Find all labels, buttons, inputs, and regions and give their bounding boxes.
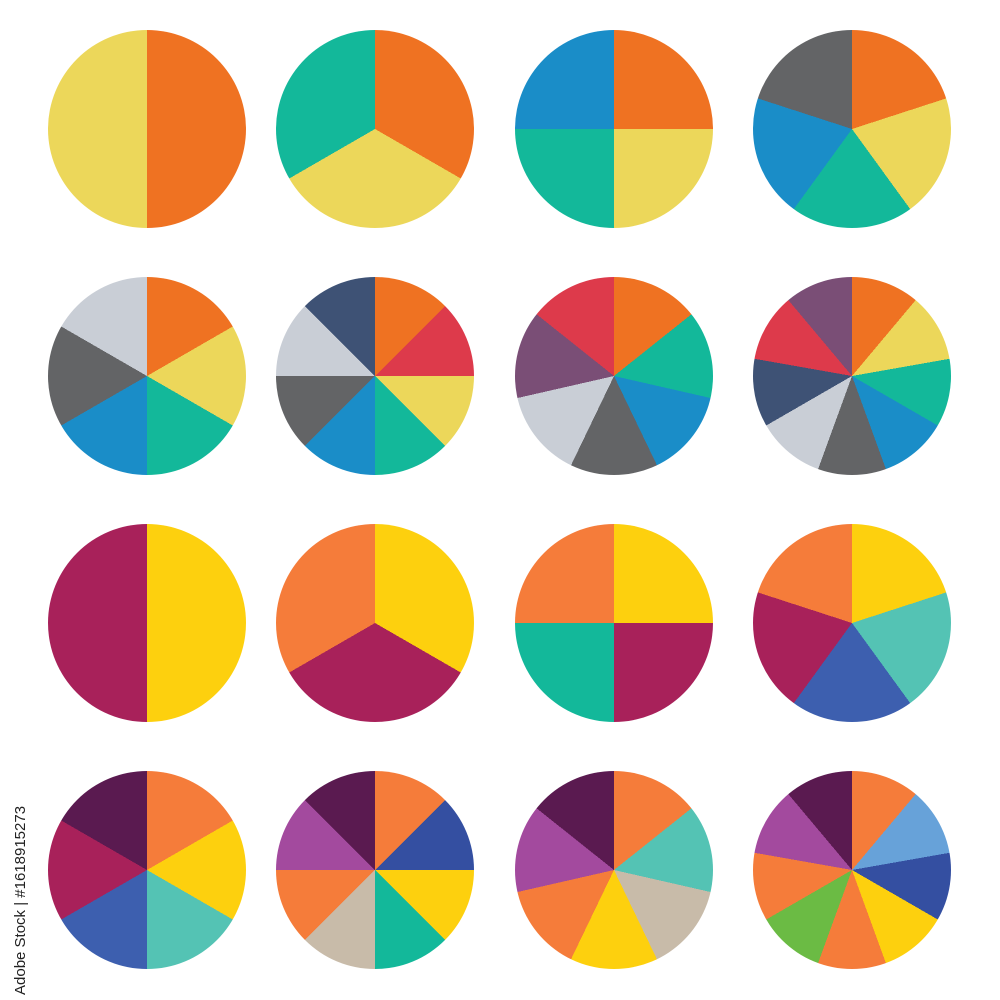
pie: 6 slices <box>48 771 246 969</box>
pie: 2 slices yellow magenta <box>48 524 246 722</box>
credit text: Adobe Stock | #1618915273 <box>12 806 29 995</box>
pie: 3 slices <box>276 30 474 228</box>
pie: 9 slices <box>753 771 951 969</box>
pie: 6 slices <box>48 277 246 475</box>
pie: 7 slices <box>515 277 713 475</box>
pie: 7 slices <box>515 771 713 969</box>
pie: 3 slices <box>276 524 474 722</box>
pie: 9 slices <box>753 277 951 475</box>
pie: 5 slices <box>753 524 951 722</box>
pie: 5 slices <box>753 30 951 228</box>
pie: 4 slices <box>515 524 713 722</box>
pie: 2 slices orange yellow <box>48 30 246 228</box>
pie: 8 slices <box>276 277 474 475</box>
pie: 8 slices <box>276 771 474 969</box>
pie: 4 slices <box>515 30 713 228</box>
